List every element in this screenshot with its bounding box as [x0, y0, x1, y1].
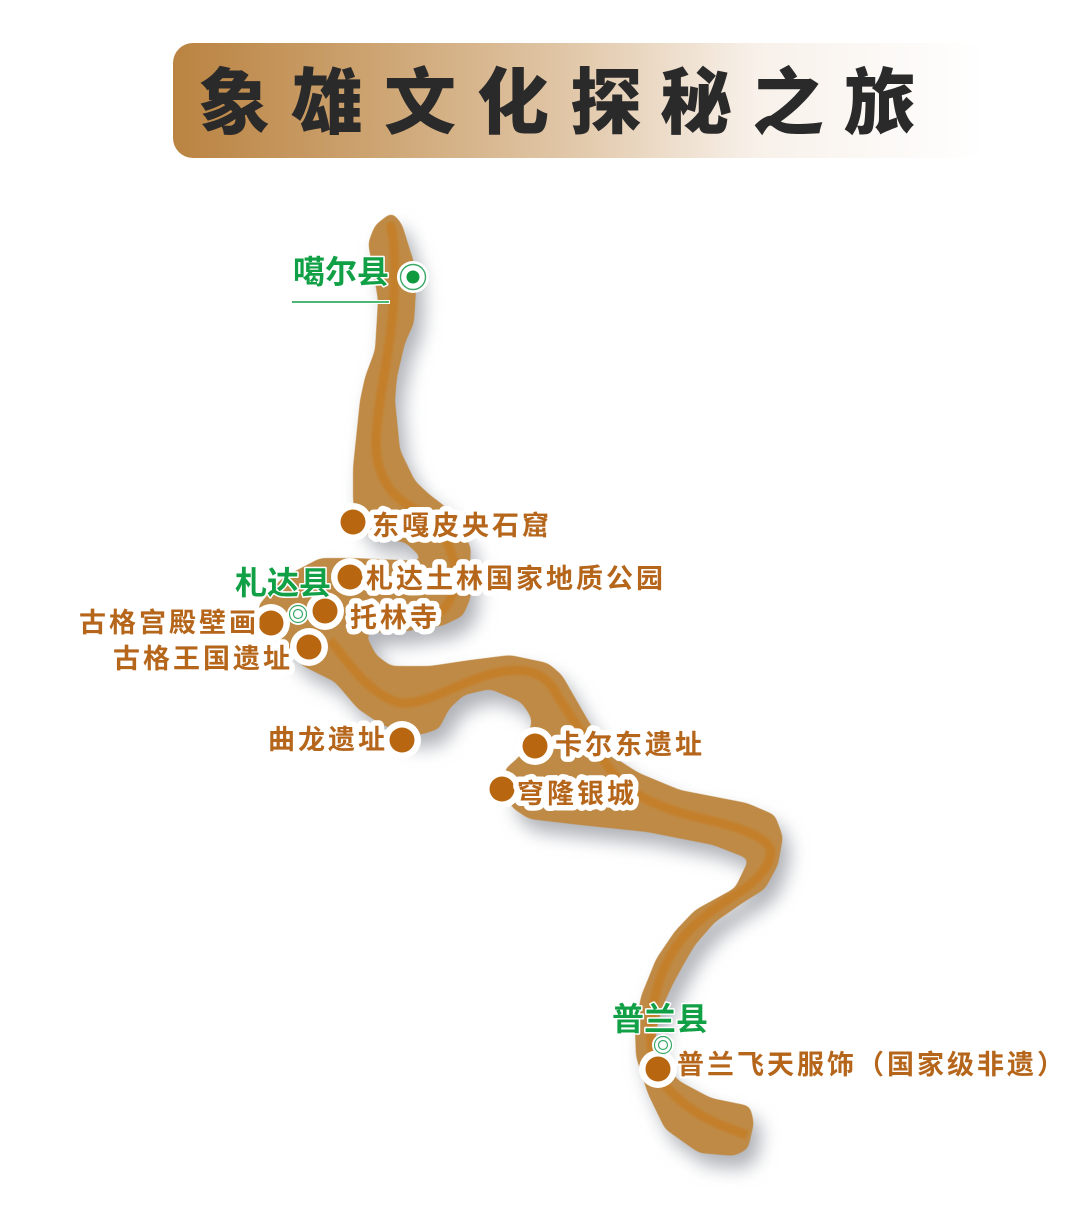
label: 普兰县: 普兰县 [612, 1001, 708, 1037]
site: 穹隆银城: 穹隆银城 [517, 778, 637, 809]
county marker: 普兰县 [612, 1001, 708, 1056]
site: 古格王国遗址 [113, 628, 328, 674]
site: 曲龙遗址 [268, 721, 421, 759]
site: 托林寺: 托林寺 [350, 603, 440, 633]
site: 曲龙遗址: 曲龙遗址 [268, 725, 388, 755]
icon: location target [652, 1034, 674, 1056]
title text: 秘 [660, 64, 732, 144]
title text: 文 [384, 64, 456, 144]
site: 卡尔东遗址: 卡尔东遗址 [555, 730, 705, 760]
title text: 探 [570, 64, 642, 144]
site: 东嘎皮央石窟 [334, 503, 552, 541]
site: 札达土林国家地质公园: 札达土林国家地质公园 [366, 564, 666, 594]
site: 古格宫殿壁画 [79, 604, 290, 642]
icon: location target [287, 603, 309, 625]
site: 古格王国遗址: 古格王国遗址 [113, 644, 293, 674]
county marker: 札达县 [235, 565, 331, 625]
label: 噶尔县: 噶尔县 [293, 254, 389, 290]
underline [292, 300, 390, 304]
title text: 旅 [844, 64, 916, 144]
site: 东嘎皮央石窟: 东嘎皮央石窟 [372, 511, 552, 541]
title text: 之 [752, 64, 824, 144]
ribbon body [257, 212, 783, 1156]
site: 普兰飞天服饰（国家级非遗）: 普兰飞天服饰（国家级非遗） [677, 1050, 1067, 1080]
title text: 雄 [291, 64, 363, 144]
site: 卡尔东遗址 [516, 727, 705, 765]
title banner [173, 43, 985, 158]
icon: location target [397, 261, 429, 293]
site: 托林寺 [306, 592, 440, 633]
title text: 化 [477, 64, 549, 144]
site: 穹隆银城 [483, 770, 637, 809]
site: 古格宫殿壁画: 古格宫殿壁画 [79, 608, 259, 638]
route map ribbon [257, 212, 783, 1156]
title text: 象 [198, 64, 270, 144]
label: 札达县: 札达县 [235, 565, 331, 601]
ribbon centre line, upper section [376, 226, 455, 612]
county marker: 噶尔县 [292, 254, 429, 302]
title background bar [173, 43, 985, 158]
ribbon centre line, lower section [330, 640, 771, 1135]
